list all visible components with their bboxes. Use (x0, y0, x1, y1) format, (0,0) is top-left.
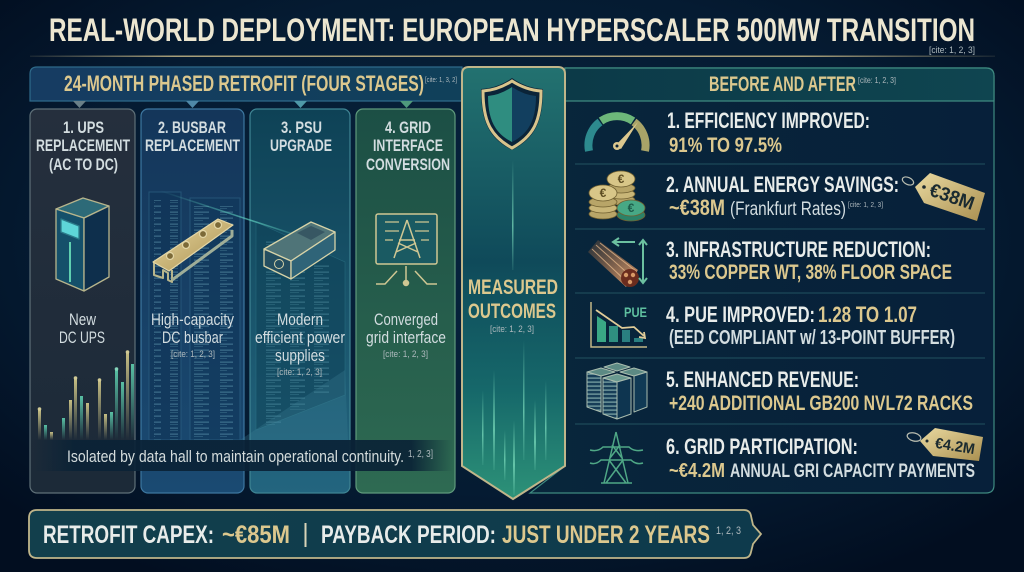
icon: gauge (588, 116, 646, 151)
panel: stage 4 grid interface: 4. GRID (385, 118, 431, 137)
row 4: PUE: 4. PUE IMPROVED: (666, 302, 815, 327)
panel: stage 2 busbar: [cite: 1, 2, 3] (171, 349, 215, 359)
panel: stage 1 UPS: (AC TO DC) (49, 155, 118, 174)
row 5: revenue (587, 363, 973, 419)
row 2: energy savings: 2. ANNUAL ENERGY SAVINGS: (666, 172, 899, 197)
panel: stage 4 grid interface: [cite: 1, 2, 3] (383, 349, 428, 359)
banner: capex and payback: RETROFIT CAPEX: (43, 521, 214, 549)
panel: stage 3 PSU: efficient power (255, 328, 345, 347)
row 5: revenue: 5. ENHANCED REVENUE: (666, 367, 859, 392)
icon: DC UPS cabinet (56, 198, 109, 291)
icon: power supply unit (264, 222, 335, 279)
icon: PUE falling chart: PUE (624, 304, 647, 320)
panel: stage 1 UPS: DC UPS (59, 328, 105, 347)
banner: capex and payback: JUST UNDER 2 YEARS (502, 521, 710, 549)
icon: transmission pylon (590, 432, 643, 483)
panel: stage 1 UPS: REPLACEMENT (36, 136, 130, 155)
callout: isolated by data hall (33, 440, 453, 471)
icon: euro coins (589, 171, 645, 221)
heading: before and after: BEFORE AND AFTER (709, 73, 856, 96)
row 4: PUE (591, 302, 955, 349)
server racks backdrop (149, 192, 240, 440)
panel: stage 3 PSU: [cite: 1, 2, 3] (277, 367, 322, 377)
panel: stage 4 grid interface (356, 101, 455, 493)
server racks backdrop (256, 222, 345, 430)
icon: PUE falling chart (591, 302, 647, 347)
icon: euro coins: € (628, 201, 635, 215)
icon: busbar (153, 219, 233, 282)
row 2: energy savings: [cite: 1, 2, 3] (848, 202, 883, 209)
row 2: energy savings (589, 171, 985, 221)
banner: capex and payback: ~€85M (222, 521, 290, 549)
panel: stage 1 UPS: New (69, 310, 97, 329)
icon: server racks (587, 363, 647, 419)
panel: stage 3 PSU: 3. PSU (281, 118, 322, 137)
banner: capex and payback: PAYBACK PERIOD: (321, 521, 496, 549)
panel: stage 4 grid interface: INTERFACE (373, 136, 443, 155)
panel: stage 3 PSU: UPGRADE (270, 136, 332, 155)
heading: before and after: [cite: 1, 2, 3] (858, 76, 896, 85)
panel: stage 3 PSU: supplies (275, 346, 325, 365)
row 2: energy savings: ~€38M (669, 195, 725, 220)
panel: measured outcomes (462, 67, 565, 499)
icon: shield (481, 78, 543, 150)
panel: stage 1 UPS (30, 101, 135, 493)
panel: stage 2 busbar: High-capacity (151, 310, 234, 329)
heading: measured outcomes (468, 276, 558, 334)
heading: measured outcomes: MEASURED (468, 276, 558, 299)
panel: stage 2 busbar: 2. BUSBAR (158, 118, 226, 137)
panel: phased retrofit header: 24-MONTH PHASED RETROFIT (FOUR STAGES) (64, 71, 424, 96)
row 6: grid participation: ~€4.2M (669, 460, 725, 482)
panel: phased retrofit header (30, 67, 462, 101)
panel: phased retrofit header: [cite: 1, 3, 2] (425, 77, 457, 84)
icon: price tag €38M: €38M (927, 180, 977, 215)
icon: price tag €38M (901, 173, 985, 221)
row 6: grid participation: 6. GRID PARTICIPATION: (666, 434, 858, 459)
icon: price tag €4.2M: €4.2M (934, 435, 976, 458)
row 1: efficiency: 1. EFFICIENCY IMPROVED: (667, 108, 870, 133)
icon: price tag €4.2M (906, 428, 983, 461)
callout: isolated by data hall: Isolated by data hall to maintain operational continuity. (67, 447, 404, 466)
row 4: PUE: 1.28 TO 1.07 (818, 302, 917, 327)
row 1: efficiency: 91% TO 97.5% (669, 134, 782, 157)
banner: capex and payback: 1, 2, 3 (716, 525, 741, 537)
panel: stage 4 grid interface: grid interface (366, 328, 446, 347)
panel: stage 1 UPS: 1. UPS (63, 118, 104, 137)
panel: stage 2 busbar: REPLACEMENT (145, 136, 240, 155)
icon: euro coins: € (600, 186, 607, 200)
icon: copper cable and arrows (588, 238, 647, 287)
heading: measured outcomes: OUTCOMES (468, 300, 556, 323)
icon: converged grid interface (376, 214, 437, 286)
row 1: efficiency (588, 108, 870, 157)
row 2: energy savings: (Frankfurt Rates) (730, 199, 846, 220)
title: [cite: 1, 2, 3] (929, 45, 975, 55)
row 3: infrastructure reduction (588, 237, 952, 287)
panel: stage 3 PSU: Modern (277, 310, 323, 329)
callout: isolated by data hall: 1, 2, 3] (408, 449, 433, 460)
light streaks (482, 160, 546, 495)
icon: euro coins: € (618, 172, 625, 186)
panel: before and after (530, 68, 994, 493)
panel: stage 3 PSU (160, 101, 350, 493)
chart: rising light bars (38, 350, 134, 440)
panel: stage 4 grid interface: Converged (374, 310, 438, 329)
row 6: grid participation (590, 428, 983, 483)
panel: stage 4 grid interface: CONVERSION (366, 155, 450, 174)
heading: measured outcomes: [cite: 1, 2, 3] (490, 324, 534, 334)
banner: capex and payback (29, 510, 761, 558)
panel: stage 2 busbar: DC busbar (162, 328, 223, 347)
panel: stage 2 busbar (141, 101, 244, 493)
